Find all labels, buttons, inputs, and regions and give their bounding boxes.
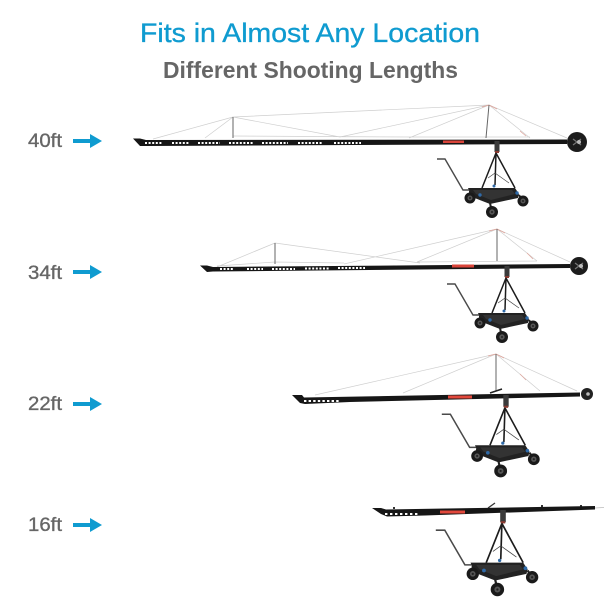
label: 40ft: 40ft: [28, 131, 63, 152]
label: 34ft: 34ft: [28, 263, 63, 284]
jib: 34ft: [200, 229, 588, 343]
row: 22ft: [28, 354, 593, 477]
arrow: 40ft: [73, 134, 102, 148]
row: 40ft: [28, 105, 587, 218]
label: 22ft: 22ft: [28, 394, 63, 415]
jib: 16ft: [372, 503, 604, 596]
label: 16ft: 16ft: [28, 515, 63, 536]
title: Fits in Almost Any Location: [140, 18, 480, 48]
row: 34ft: [28, 229, 588, 343]
arrow: 16ft: [73, 518, 102, 532]
subtitle: Different Shooting Lengths: [163, 57, 458, 83]
row: 16ft: [28, 503, 604, 596]
arrow: 22ft: [73, 397, 102, 411]
jib: 22ft: [292, 354, 593, 477]
jib: 40ft: [133, 105, 587, 218]
arrow: 34ft: [73, 265, 102, 279]
